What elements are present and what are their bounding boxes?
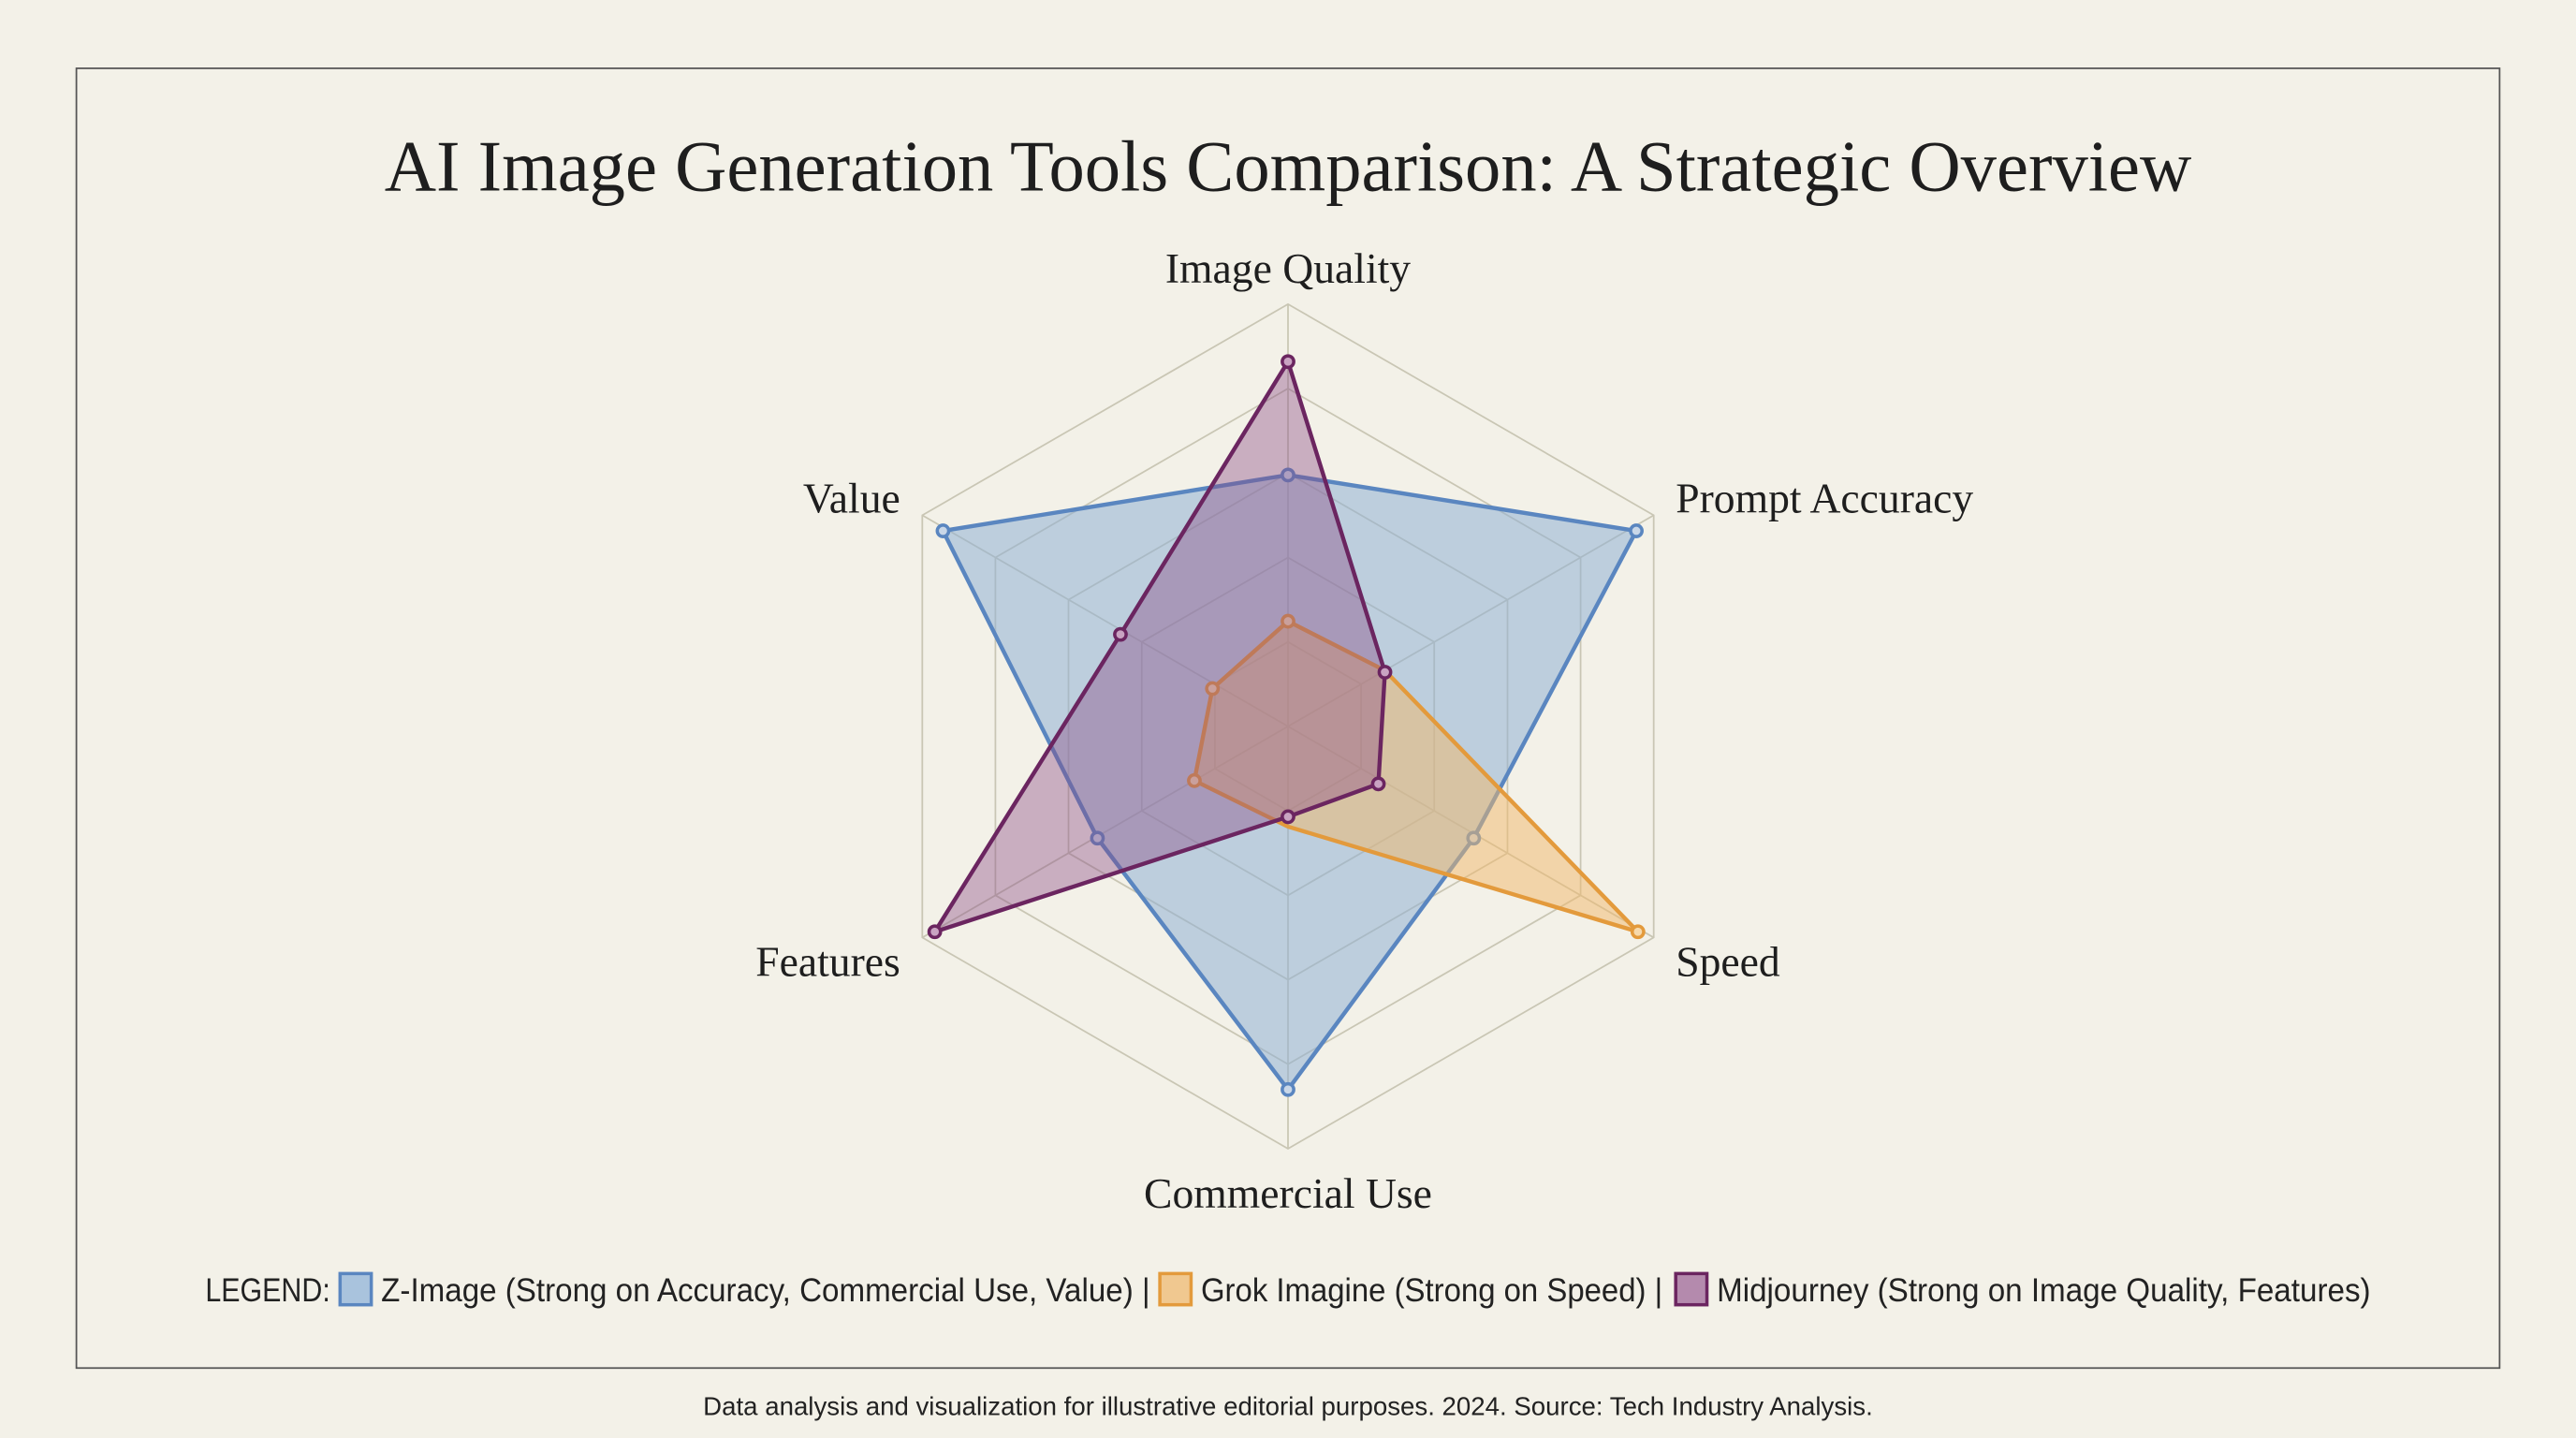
legend: LEGEND: [205, 1272, 330, 1309]
legend: Z-Image (Strong on Accuracy, Commercial Use, Value) | [381, 1272, 1150, 1309]
legend: Grok Imagine (Strong on Speed) | [1201, 1272, 1662, 1309]
series: Midjourney [929, 356, 1391, 937]
axis labels: Commercial Use [1144, 1169, 1432, 1217]
radar chart [755, 244, 1973, 1217]
footer: Data analysis and visualization for illustrative editorial purposes. 2024. Source: Tech Industry Analysis. [703, 1391, 1873, 1420]
axis labels: Prompt Accuracy [1676, 475, 1973, 522]
axis labels: Speed [1676, 938, 1780, 986]
axis labels [755, 244, 1973, 1217]
axis labels: Image Quality [1165, 244, 1411, 292]
axis labels: Features [755, 938, 900, 986]
legend: Midjourney (Strong on Image Quality, Features) [1717, 1272, 2371, 1309]
series: Grok Imagine [1189, 615, 1644, 937]
series: Z-Image [937, 469, 1642, 1095]
axis labels: Value [803, 475, 900, 522]
title: AI Image Generation Tools Comparison: A Strategic Overview [385, 126, 2192, 207]
legend [205, 1272, 2371, 1309]
